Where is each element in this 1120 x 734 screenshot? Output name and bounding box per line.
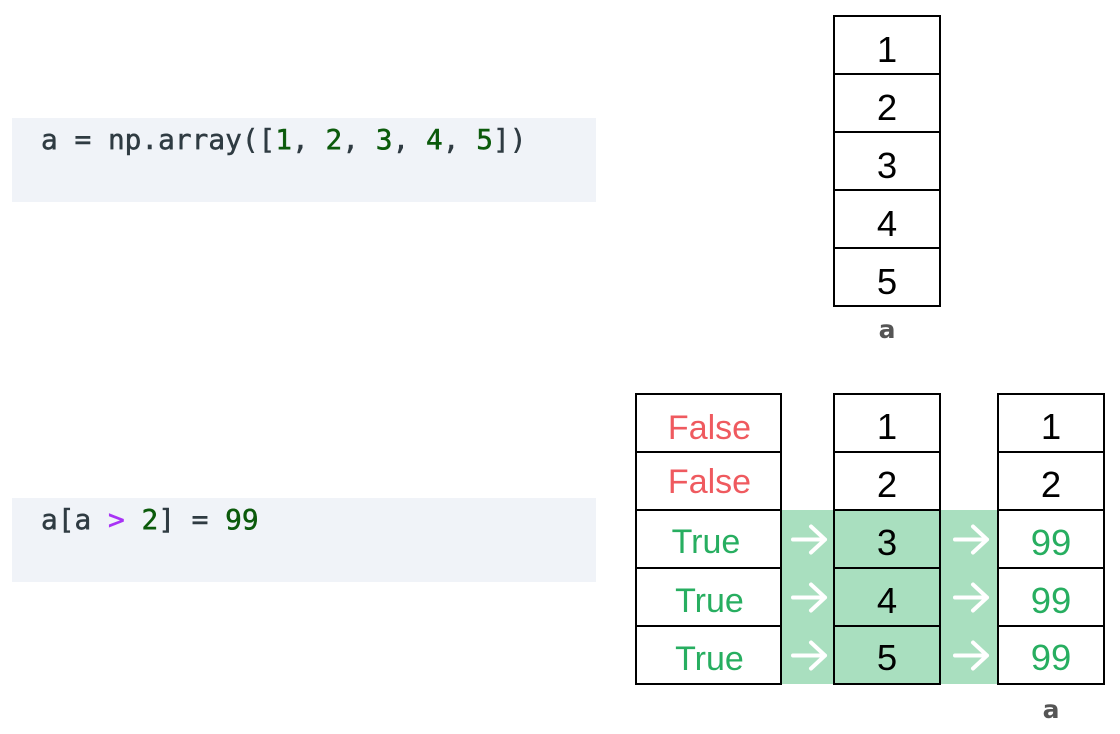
code block: boolean assignment	[12, 498, 596, 582]
middle column: array values with selected cells	[834, 394, 940, 684]
arrows: values to result	[955, 526, 987, 668]
result column: updated array: 99	[1031, 522, 1071, 563]
middle column: array values with selected cells: 5	[877, 637, 897, 678]
result column: updated array	[998, 394, 1104, 684]
array a: original column: 5	[877, 261, 897, 302]
result column: updated array: 1	[1041, 406, 1061, 447]
boolean mask column	[636, 394, 781, 684]
middle column: array values with selected cells: 1	[877, 406, 897, 447]
code block: array creation	[12, 118, 596, 202]
arrows: mask to values	[793, 526, 825, 668]
boolean mask column: True	[675, 640, 744, 678]
array a: original column: 2	[877, 87, 897, 128]
boolean mask column: False	[668, 463, 751, 501]
array a: original column: 3	[877, 145, 897, 186]
label: a (top): a	[879, 315, 895, 344]
green highlight band	[781, 510, 998, 684]
code block: array creation: a = np.array([1, 2, 3, 4, 5])	[41, 123, 526, 156]
label: a (bottom): a	[1043, 695, 1059, 724]
middle column: array values with selected cells: 2	[877, 464, 897, 505]
result column: updated array: 99	[1031, 580, 1071, 621]
middle column: array values with selected cells: 3	[877, 522, 897, 563]
result column: updated array: 99	[1031, 637, 1071, 678]
boolean mask column: True	[675, 582, 744, 620]
boolean mask column: False	[668, 409, 751, 447]
array a: original column: 1	[877, 29, 897, 70]
array a: original column: 4	[877, 203, 897, 244]
array a: original column	[834, 16, 940, 306]
result column: updated array: 2	[1041, 464, 1061, 505]
boolean mask column: True	[672, 523, 740, 561]
middle column: array values with selected cells: 4	[877, 580, 897, 621]
code block: boolean assignment: a[a > 2] = 99	[41, 503, 259, 536]
